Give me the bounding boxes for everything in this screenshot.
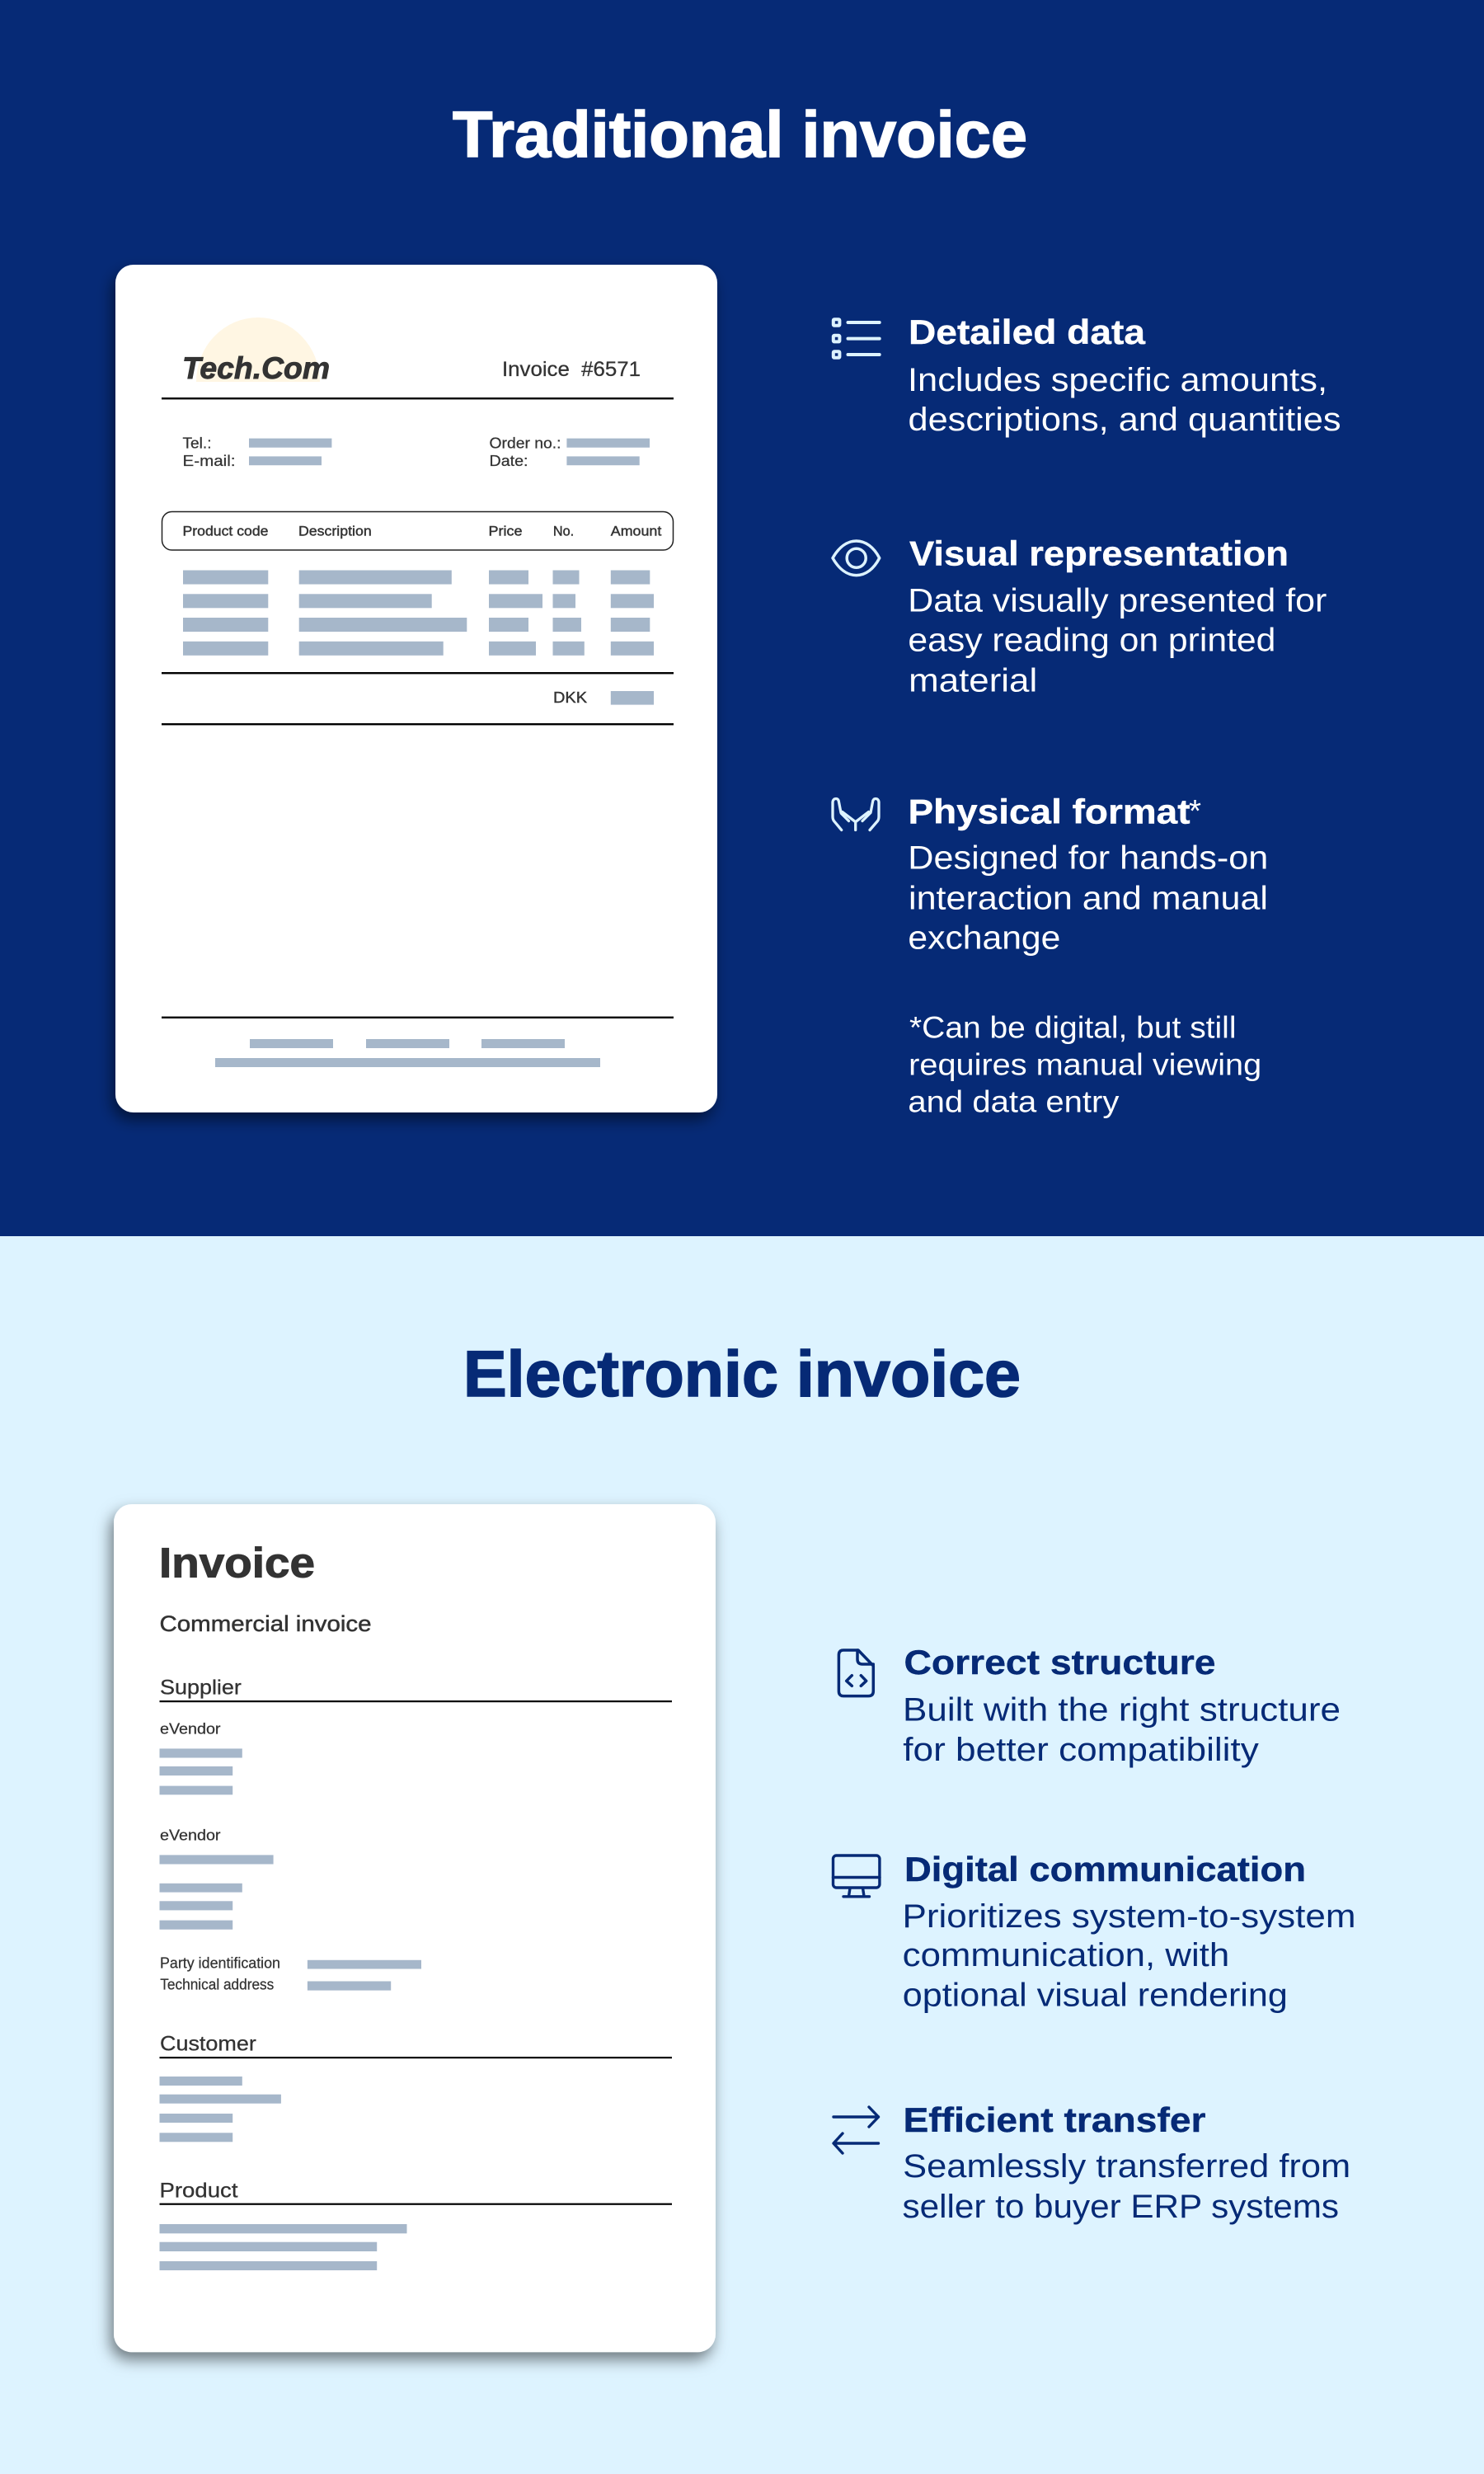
table rows [183,571,654,656]
section: supplier: Technical address [160,1976,274,1992]
panel: electronic invoice [0,1236,1484,2474]
feature: visual representation [908,534,1327,698]
table header: No. [553,523,574,539]
feature: correct structure [903,1643,1341,1768]
section: supplier: Party identification [160,1954,280,1971]
feature: detailed data [908,313,1341,438]
table header [162,511,673,550]
feature: efficient transfer [902,2100,1350,2225]
table header: Amount [611,523,662,539]
order fields: Date: [490,453,528,469]
feature: efficient transfer: Efficient transfer [904,2100,1205,2139]
icon: open hands [833,798,879,830]
icon: list [834,319,880,358]
icon: code file [838,1650,873,1696]
table header: Product code [183,523,269,539]
feature: visual representation: Visual representation [909,534,1289,573]
order fields [490,435,650,469]
contact fields: E-mail: [183,453,236,469]
footer placeholders [215,1039,600,1067]
feature: visual representation: material [909,662,1037,698]
feature: physical format: interaction and manual [909,880,1268,916]
feature: physical format: Designed for hands-on [908,840,1268,876]
icon: monitor [833,1856,880,1897]
footnote: requires manual viewing [909,1047,1261,1081]
total [553,689,654,706]
panel: traditional invoice [0,0,1484,1236]
document subheading: Commercial invoice [160,1611,371,1636]
feature: physical format: * [1189,794,1201,829]
feature: digital communication: optional visual rendering [903,1978,1288,2014]
section: customer: Customer [160,2033,256,2056]
feature: physical format: Physical format [909,792,1190,830]
feature: correct structure: Correct structure [904,1643,1215,1681]
table header: Description [298,523,372,539]
invoice document: electronic [114,1504,716,2352]
feature: efficient transfer: seller to buyer ERP systems [902,2189,1339,2225]
feature: visual representation: easy reading on printed [908,622,1275,658]
footnote: and data entry [908,1084,1120,1118]
feature: physical format: exchange [908,920,1060,957]
feature: efficient transfer: Seamlessly transferred from [903,2148,1350,2185]
document heading: Invoice [159,1540,315,1587]
title: electronic invoice: Electronic invoice [463,1337,1021,1410]
feature: detailed data: Includes specific amounts, [908,362,1327,398]
feature: correct structure: for better compatibility [903,1732,1259,1768]
feature: detailed data: Detailed data [909,313,1146,351]
section: product [160,2180,672,2270]
icon: eye [833,541,880,576]
feature: correct structure: Built with the right structure [903,1692,1341,1729]
feature: visual representation: Data visually presented for [908,583,1327,619]
feature: digital communication [902,1850,1355,2014]
section: customer [160,2033,672,2142]
contact fields [183,435,331,469]
title: traditional invoice: Traditional invoice [453,97,1027,171]
feature: digital communication: Digital communication [904,1850,1306,1888]
invoice number: Invoice #6571 [502,358,641,381]
section: product: Product [160,2180,238,2203]
section: supplier [160,1677,672,1992]
table header: Price [488,523,523,539]
contact fields: Tel.: [183,435,211,452]
feature: digital communication: communication, with [903,1937,1229,1973]
total: DKK [553,689,587,706]
logo: Tech.Com [182,317,330,385]
section: supplier: eVendor [160,1720,221,1737]
order fields: Order no.: [490,435,561,452]
section: supplier: Supplier [160,1677,242,1700]
footnote: *Can be digital, but still [909,1010,1237,1044]
feature: digital communication: Prioritizes system-to-system [902,1898,1355,1935]
feature: detailed data: descriptions, and quantities [909,402,1341,438]
invoice document: traditional [115,265,717,1112]
logo: Tech.Com: Tech.Com [182,351,330,385]
section: supplier: eVendor [160,1827,221,1843]
footnote [908,1010,1261,1118]
icon: transfer arrows [834,2107,879,2153]
feature: physical format [908,792,1268,957]
